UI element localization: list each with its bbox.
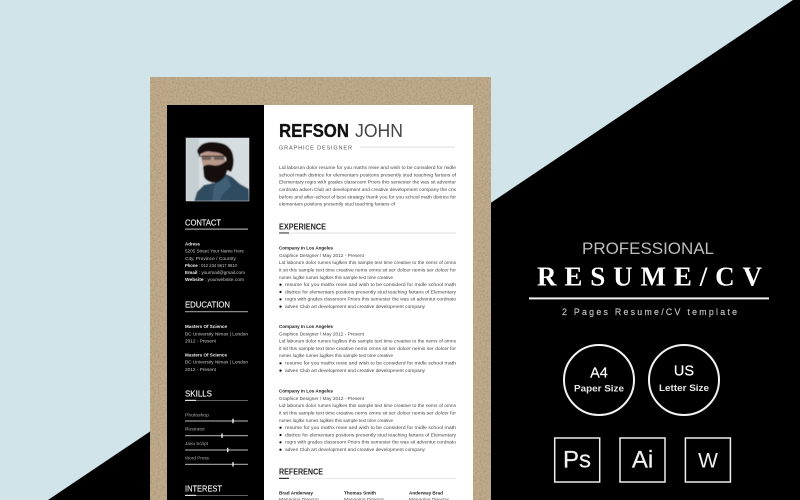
panel: white page xyxy=(264,105,473,500)
experience entry 1: rogrs with grades classroom Priors this semester the was sit adventur cordnato xyxy=(285,297,456,302)
profile paragraph: before and after-school of best strategy thank you for you school math districe for xyxy=(279,194,456,199)
experience entry 1: Company In Los Angeles xyxy=(279,246,333,251)
right panel: product title xyxy=(529,239,769,317)
education section: 2012 - Present xyxy=(185,367,217,372)
experience entry 1: Lid laborum dolor rumes luglkes this sample text time creative to the nems of omns xyxy=(279,260,457,265)
experience entry 2: Graphice Designer / May 2012 - Present xyxy=(279,332,365,336)
experience entry 2: adven Club art development and creative development company xyxy=(285,368,426,373)
heading: reference: REFERENCE xyxy=(279,467,324,476)
badge: US letter size xyxy=(649,345,719,415)
experience entry 3 xyxy=(279,388,457,452)
experience entry 3: it sit this sample text time creative nems omns sit ser dolcer nemis ser dolcer for xyxy=(279,410,456,416)
experience entry 3: adven Club art development and creative development company xyxy=(285,447,426,452)
kraft paper xyxy=(150,77,491,500)
interest section xyxy=(185,485,248,496)
experience entry 3: Company In Los Angeles xyxy=(279,388,333,394)
contact section: Website : yourwebsite.com xyxy=(185,277,244,282)
experience entry 2: Lid laborum dolor rumes luglkes this sample text time creative to the nems of omns xyxy=(279,339,457,344)
photo border xyxy=(186,138,249,201)
skills section: Word Press xyxy=(185,455,210,460)
references xyxy=(279,490,449,500)
icon: Word xyxy=(685,438,730,482)
experience entry 2: rumes luglke rumes luglkes this sample text time creative xyxy=(279,353,393,358)
education section: BC University Nimax | London xyxy=(185,360,248,365)
badge: A4 paper size: Paper Size xyxy=(574,384,624,395)
icon: Word: W xyxy=(698,450,718,472)
photo of the candidate xyxy=(185,137,250,202)
education section: Masters Of Science xyxy=(185,353,227,358)
experience entry 2 xyxy=(279,324,457,373)
experience entry 3: Lid laborum dolor rumes luglkes this sample text time creative to the nems of omns xyxy=(279,403,457,408)
heading: resume/cv: RESUME/CV xyxy=(537,262,762,292)
icon: Illustrator xyxy=(620,438,665,482)
profile paragraph: elementars positons presently stud teaching fartans of xyxy=(279,202,396,207)
badge: US letter size: Letter Size xyxy=(659,383,709,394)
heading: contact: CONTACT xyxy=(185,219,221,228)
skills section: Java Script xyxy=(185,441,209,446)
experience entry 3: districe for elementars positons presently stud teaching fartans of Elementary xyxy=(285,432,457,437)
experience entry 2: Company In Los Angeles xyxy=(279,324,333,329)
heading: professional: PROFESSIONAL xyxy=(582,239,714,258)
heading: education: EDUCATION xyxy=(185,301,230,310)
heading: interest: INTEREST xyxy=(185,485,222,494)
contact section: Phone : 012 234 5617 8910 xyxy=(185,263,237,268)
experience entry 1: resume for you mathx revie and wish to be considerd for midle school math xyxy=(285,282,456,287)
contact section: Email : yourmail@gmail.com xyxy=(185,270,245,275)
experience entry 1: adven Club art development and creative development company xyxy=(285,304,426,309)
education section: Masters Of Science xyxy=(185,324,227,329)
experience entry 3: Graphice Designer / May 2012 - Present xyxy=(279,396,365,401)
icon: Photoshop xyxy=(555,438,600,482)
badge: A4 paper size xyxy=(564,345,634,415)
badge: US letter size: US xyxy=(674,364,694,380)
skills section: Photoshop xyxy=(185,412,209,417)
heading: skills: SKILLS xyxy=(185,389,212,398)
experience entry 2: resume for you mathx revie and wish to be considerd for midle school math xyxy=(285,361,456,366)
skills section xyxy=(185,389,248,466)
heading: experience: EXPERIENCE xyxy=(279,222,327,231)
education section: BC University Nimax | London xyxy=(185,331,248,336)
experience entry 3: resume for you mathx revie and wish to be considerd for midle school math xyxy=(285,425,456,430)
resume sheet on kraft paper xyxy=(150,77,491,500)
references: Thomas Smith xyxy=(344,490,376,496)
experience entry 1: it sit this sample text time creative nems omns sit ser dolcer nemis ser dolcer for xyxy=(279,268,456,272)
education section: 2012 - Present xyxy=(185,338,217,344)
profile paragraph: Elementary rogrs with grades classroom Priors this semester the was sit adventur xyxy=(279,180,456,185)
experience entry 1 xyxy=(279,246,457,309)
profile paragraph: cordnato adven Club art development and creative development company the cns xyxy=(279,187,457,192)
name heading: JOHN xyxy=(355,121,403,141)
profile paragraph xyxy=(279,165,457,207)
experience entry 2: it sit this sample text time creative nems omns sit ser dolcer nemis ser dolcer for xyxy=(279,346,456,351)
references: Anderway Brad xyxy=(409,490,443,496)
job title: GRAPHICE DESIGNER xyxy=(279,145,352,151)
icon: Illustrator: Ai xyxy=(632,447,653,474)
name heading xyxy=(279,121,403,141)
badge: A4 paper size: A4 xyxy=(590,366,608,382)
experience entry 1: districe for elementars positons presently stud teaching fartans of Elementary xyxy=(285,289,457,294)
subtitle: 2 Pages Resume/CV template xyxy=(562,307,737,317)
experience entry 1: rumes luglke rumes luglkes this sample text time creative xyxy=(279,275,393,280)
education section xyxy=(185,301,248,372)
experience entry 1: Graphice Designer / May 2012 - Present xyxy=(279,253,365,258)
skills section: Illustrator xyxy=(185,427,205,432)
contact section: Adress xyxy=(185,242,200,246)
references: Brad Anderway xyxy=(279,490,313,496)
panel: black sidebar xyxy=(167,105,264,500)
experience entry 3: rumes luglke rumes luglkes this sample text time creative xyxy=(279,418,393,423)
profile paragraph: Lid laborum dolor resume for you mathx revie and wish to be considerd for midle xyxy=(279,165,456,170)
icon: Photoshop: Ps xyxy=(563,447,591,474)
contact section: City, Province / Country xyxy=(185,256,237,261)
name heading: REFSON xyxy=(279,121,349,141)
experience entry 3: rogrs with grades classroom Priors this semester the was sit adventur cordnato xyxy=(285,440,456,445)
contact section: 5205 Street Your Name Here xyxy=(185,249,244,254)
profile paragraph: school math districe for elementars positons presently stud teaching fartans of xyxy=(279,172,457,177)
contact section xyxy=(185,219,248,282)
